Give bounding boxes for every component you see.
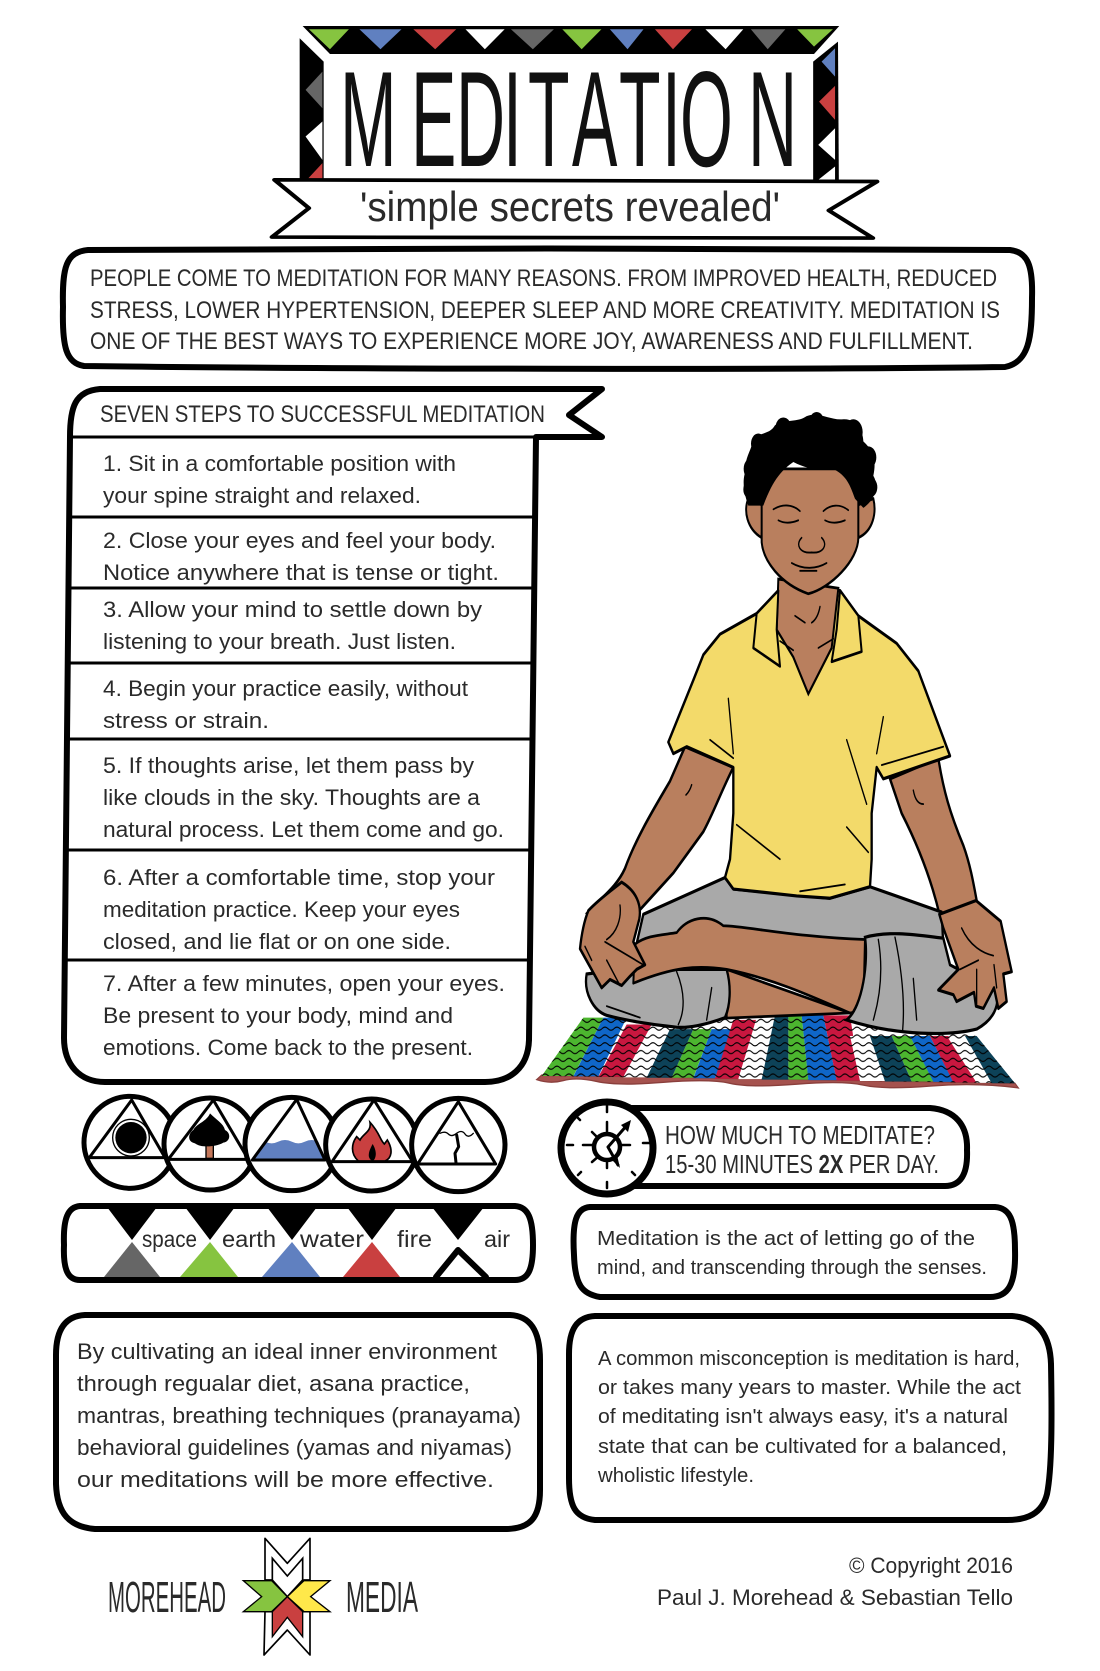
subtitle: 'simple secrets revealed' [360,183,780,230]
panel: inner environment: By cultivating an ideal inner environment [77,1339,497,1364]
collar [753,591,862,666]
facial features [773,505,848,650]
step 2: 2. Close your eyes and feel your body. [103,528,496,553]
heading: SEVEN STEPS TO SUCCESSFUL MEDITATION [100,401,545,428]
panel: inner environment: mantras, breathing techniques (pranayama) [77,1403,521,1428]
neck [777,579,838,694]
step 4 [103,676,468,733]
panel: introduction [63,248,1032,369]
icon: earth [164,1098,256,1190]
logo: Morehead Media: MOREHEAD [108,1573,226,1622]
icon: air [412,1098,505,1192]
panel: introduction: ONE OF THE BEST WAYS TO EXPERIENCE MORE JOY, AWARENESS AND FULFILLMENT. [90,328,973,355]
step 5: 5. If thoughts arise, let them pass by [103,753,474,778]
panel: definition: Meditation is the act of letting go of the [597,1228,975,1250]
face [762,469,858,594]
left arm [588,747,733,912]
step 7 [103,971,505,1060]
shirt folds [710,698,943,891]
shirt [668,591,950,898]
step 3: listening to your breath. Just listen. [103,629,456,654]
subtitle ribbon [272,180,877,238]
step 7: emotions. Come back to the present. [103,1035,473,1060]
icon: fire [326,1099,418,1191]
panel: misconception: of meditating isn't always easy, it's a natural [598,1406,1008,1428]
icon: star mark [243,1538,330,1655]
label: air: air [484,1226,510,1252]
step 5: natural process. Let them come and go. [103,817,504,842]
panel: misconception: state that can be cultivated for a balanced, [598,1436,1007,1458]
right knee [847,934,997,1033]
panel: misconception [569,1316,1052,1520]
panel: inner environment [56,1315,540,1529]
label: earth: earth [222,1226,276,1252]
ears [746,499,875,538]
trouser folds [607,937,917,1030]
step 2: Notice anywhere that is tense or tight. [103,560,499,585]
step 3: 3. Allow your mind to settle down by [103,597,482,622]
step 1 [103,451,456,508]
panel: seven steps [64,389,602,1082]
panel: definition [574,1207,1015,1297]
icon: space [84,1096,176,1188]
step 6: meditation practice. Keep your eyes [103,897,460,922]
step 4: stress or strain. [103,708,269,733]
logo: Morehead Media [108,1538,418,1655]
element symbols [84,1096,505,1192]
copyright [657,1553,1013,1610]
main title text: MEDITATION [340,43,797,195]
left knee [586,969,730,1027]
copyright: © Copyright 2016 [849,1553,1013,1578]
panel: inner environment: our meditations will be more effective. [77,1467,494,1492]
panel: definition: mind, and transcending through the senses. [597,1257,987,1279]
panel: inner environment: through regualar diet, asana practice, [77,1371,470,1396]
label: water: water [299,1226,364,1252]
callout: how much to meditate: 15-30 MINUTES 2X PER DAY. [665,1149,939,1179]
lower leg [727,969,850,1018]
hair [743,412,877,508]
step 7: 7. After a few minutes, open your eyes. [103,971,505,996]
step 1: your spine straight and relaxed. [103,483,421,508]
panel: inner environment: behavioral guidelines (yamas and niyamas) [77,1435,512,1460]
icon: water [245,1097,338,1191]
finger lines [585,905,997,1006]
crossed leg and foot [633,918,865,1013]
elbow marks [686,785,923,804]
label: space: space [142,1226,197,1252]
step 7: Be present to your body, mind and [103,1003,453,1028]
step 4: 4. Begin your practice easily, without [103,676,468,701]
step 3 [103,597,482,654]
label: fire: fire [397,1226,432,1252]
panel: misconception: wholistic lifestyle. [597,1465,754,1487]
step 5 [103,753,504,842]
step 6: 6. After a comfortable time, stop your [103,865,495,890]
right hand [938,901,1012,1008]
panel: misconception: or takes many years to master. While the act [598,1377,1021,1399]
illustration: meditating man on rug [537,412,1018,1088]
step 5: like clouds in the sky. Thoughts are a [103,785,481,810]
step 1: 1. Sit in a comfortable position with [103,451,456,476]
logo: Morehead Media: MEDIA [346,1573,418,1622]
text: HOW MUCH TO MEDITATE? [665,1120,935,1150]
left hand [580,882,645,988]
trousers waist [636,878,943,946]
step 6: closed, and lie flat or on one side. [103,929,451,954]
copyright: Paul J. Morehead & Sebastian Tello [657,1585,1013,1610]
rug [537,1015,1018,1088]
panel: misconception: A common misconception is meditation is hard, [598,1348,1020,1370]
legend: elements [64,1206,533,1280]
icon: compass [561,1102,653,1194]
right arm [890,758,977,917]
callout: how much to meditate [561,1102,967,1194]
step 6 [103,865,495,954]
title banner [272,26,877,238]
step 2 [103,528,499,585]
